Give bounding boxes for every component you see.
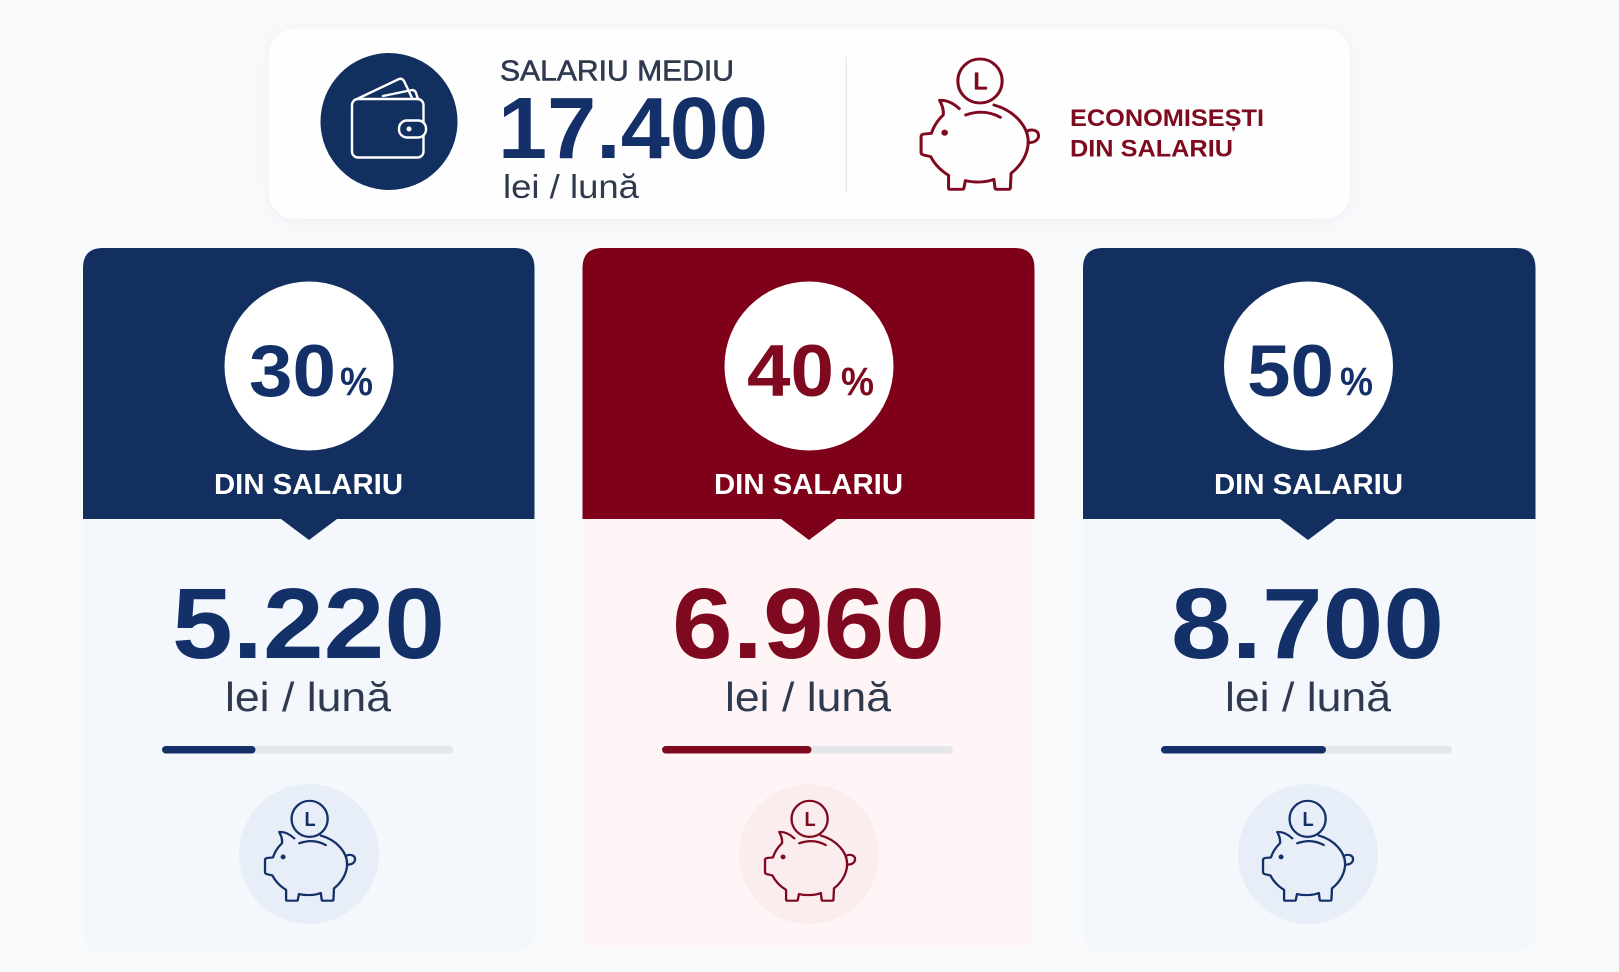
header: 50% din salariu: % bbox=[1340, 360, 1373, 404]
progress bar 30% bbox=[162, 746, 453, 754]
header: 40% din salariu: % bbox=[841, 360, 874, 404]
unit: lei / lună: lei / lună bbox=[1225, 674, 1391, 720]
value: 17.400: 17.400 bbox=[498, 80, 768, 177]
value: 5.220: 5.220 bbox=[172, 568, 445, 680]
value: 6.960: 6.960 bbox=[672, 568, 945, 680]
icon: piggy bank navy bbox=[239, 784, 379, 924]
icon: piggy bank navy: L bbox=[305, 809, 315, 829]
header: 30% din salariu: % bbox=[340, 360, 373, 404]
unit: lei / lună: lei / lună bbox=[225, 674, 391, 720]
panel: average salary summary bbox=[269, 28, 1350, 219]
icon: piggy bank red bbox=[739, 784, 879, 924]
icon: piggy bank navy bbox=[1238, 784, 1378, 924]
unit: lei / lună: lei / lună bbox=[503, 168, 640, 205]
header: 50% din salariu bbox=[1083, 248, 1536, 540]
panel: 30% card bbox=[83, 248, 534, 950]
header: 50% din salariu: 50 bbox=[1247, 331, 1334, 412]
label: economisești din salariu: ECONOMISEȘTI bbox=[1070, 105, 1264, 132]
header: 40% din salariu: 40 bbox=[747, 331, 834, 412]
label: economisești din salariu bbox=[1070, 105, 1264, 162]
header: 30% din salariu: DIN SALARIU bbox=[214, 469, 403, 501]
progress bar 40% bbox=[662, 746, 953, 754]
header: 40% din salariu bbox=[582, 248, 1034, 540]
value: 8.700: 8.700 bbox=[1171, 568, 1444, 680]
icon: piggy bank red bbox=[921, 59, 1039, 189]
icon: piggy bank navy: L bbox=[1303, 809, 1313, 829]
icon: piggy bank red: L bbox=[805, 809, 815, 829]
label: economisești din salariu: DIN SALARIU bbox=[1070, 136, 1233, 162]
header: 40% din salariu: DIN SALARIU bbox=[714, 469, 903, 501]
panel: 50% card bbox=[1083, 248, 1536, 950]
panel: 40% card bbox=[582, 248, 1034, 950]
icon: wallet bbox=[320, 53, 458, 190]
icon: piggy bank red: L bbox=[973, 69, 987, 95]
label: salariu mediu: SALARIU MEDIU bbox=[500, 56, 734, 88]
progress bar 50% bbox=[1161, 746, 1452, 754]
unit: lei / lună: lei / lună bbox=[725, 674, 891, 720]
header: 30% din salariu: 30 bbox=[249, 331, 336, 412]
header: 30% din salariu bbox=[83, 248, 534, 540]
header: 50% din salariu: DIN SALARIU bbox=[1214, 469, 1403, 501]
